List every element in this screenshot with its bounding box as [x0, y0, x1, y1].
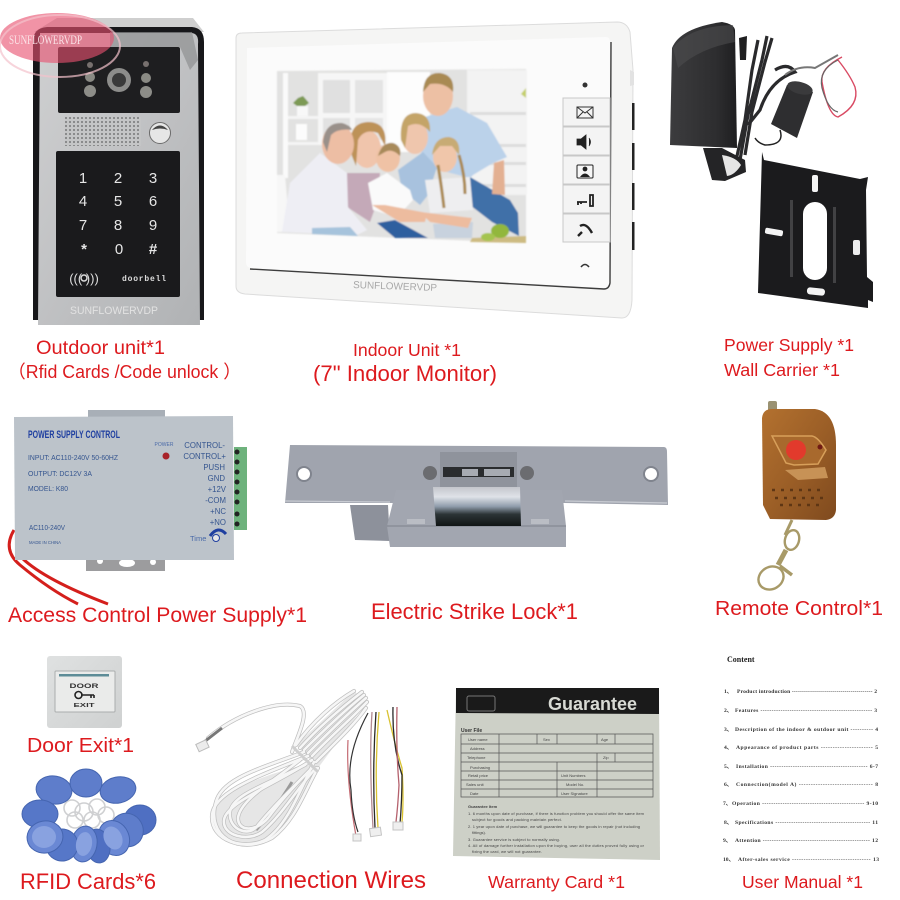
form table: Unit Numbers	[561, 773, 585, 778]
short lead: red	[348, 740, 356, 836]
icon: hang-up mark	[581, 264, 589, 267]
strike bolt	[433, 487, 521, 526]
form table: User Signature	[561, 791, 588, 796]
slot highlight	[785, 467, 828, 480]
terminal labels	[183, 441, 227, 527]
led	[818, 444, 822, 450]
icon: monitor person	[577, 165, 593, 178]
manual rows: Connection(model A) ------------------------------- 8	[736, 781, 878, 788]
keypad: 9	[149, 217, 157, 234]
monitor body	[236, 22, 634, 318]
label: wall carrier: Wall Carrier *1	[724, 360, 840, 380]
switch plate	[47, 656, 122, 728]
guarantee terms	[468, 804, 645, 854]
indicator dot	[582, 82, 588, 88]
guarantee terms: subject for goods and packing maintain perfect.	[472, 817, 562, 822]
guarantee title: Guarantee	[548, 694, 637, 714]
control box	[14, 416, 234, 560]
form table: Sex	[543, 737, 550, 742]
manual rows: 1、	[724, 689, 732, 695]
header logo	[467, 696, 495, 711]
keypad: 4	[79, 193, 87, 210]
time adjust: Time	[190, 534, 206, 543]
icon: phone handset	[578, 225, 592, 236]
form table: Sales unit	[466, 782, 484, 787]
brand text: SUNFLOWERVDP	[70, 305, 158, 317]
panel: power adapter and wall carrier	[670, 22, 873, 308]
box specifications	[28, 453, 118, 545]
manual rows: Description of the indoor & outdoor unit ---------- 4	[735, 727, 878, 733]
screen: family photo	[277, 69, 527, 243]
panel: electric strike lock	[285, 445, 668, 547]
form table: Age	[601, 737, 609, 742]
label: outdoor unit: Outdoor unit*1	[36, 337, 165, 359]
form table: Zip	[603, 755, 609, 760]
keypad	[56, 151, 180, 297]
exit text: EXIT	[74, 703, 96, 709]
cable end connector	[196, 728, 222, 752]
box specifications: OUTPUT: DC12V 3A	[28, 469, 93, 478]
wall carrier bracket	[758, 152, 873, 308]
short lead: black	[350, 713, 368, 832]
terminal labels: CONTROL-	[184, 441, 225, 450]
manual rows: 2、	[724, 708, 732, 714]
woman right	[398, 152, 437, 205]
terminal labels: GND	[208, 474, 225, 483]
manual rows: 4、	[724, 745, 732, 751]
brand text: SUNFLOWERVDP	[353, 280, 438, 294]
red button	[786, 440, 806, 460]
call button	[150, 122, 170, 144]
switch rocker	[55, 671, 115, 712]
woman left	[347, 173, 380, 222]
cable tie	[292, 746, 318, 772]
manual heading: Content	[727, 655, 755, 664]
form table: User name	[468, 737, 488, 742]
icon: speaker volume	[577, 135, 590, 149]
keypad: *	[81, 241, 87, 258]
guarantee terms: 1. 6 months upon date of purchase, if there is function problem you should offer the same item	[468, 811, 645, 816]
label: indoor unit: Indoor Unit *1	[353, 340, 461, 360]
form table: Purchasing	[470, 765, 490, 770]
boy	[368, 173, 413, 217]
manual rows: 5、	[724, 764, 732, 770]
label: rfid code unlock: （Rfid Cards /Code unlock ）	[8, 362, 241, 382]
box specifications: INPUT: AC110-240V 50-60HZ	[28, 453, 118, 462]
icon: message envelope	[577, 107, 593, 118]
red wires	[9, 530, 108, 604]
terminal labels: CONTROL+	[183, 452, 226, 461]
manual rows: 10、	[723, 857, 734, 863]
manual rows	[723, 689, 879, 863]
manual rows: Product introduction ---------------------------------------- 2	[737, 689, 877, 695]
power led: POWER	[155, 442, 174, 448]
guarantee terms: 3. Guarantee service is subject to normally using.	[468, 837, 560, 842]
guarantee terms: fittings).	[472, 830, 486, 835]
speaker grille	[65, 117, 141, 146]
form table: Retail price	[468, 773, 489, 778]
terminal labels: -COM	[205, 496, 226, 505]
panel: rfid key fobs	[22, 769, 156, 867]
terminal labels: +12V	[208, 485, 227, 494]
label: door exit: Door Exit*1	[27, 734, 134, 757]
manual rows: 8、	[724, 820, 732, 826]
short lead group 3	[387, 707, 403, 824]
keypad: 5	[114, 193, 122, 210]
dark gap in coil	[256, 782, 292, 830]
label: remote control: Remote Control*1	[715, 597, 883, 620]
apples and table	[470, 236, 526, 243]
indicator stripe	[59, 674, 109, 676]
guarantee terms: fixing the card, we will not guarantee.	[472, 849, 542, 854]
manual rows: 7、	[723, 801, 731, 807]
man standing	[470, 177, 519, 236]
old man	[282, 153, 367, 235]
manual rows: 3、	[724, 727, 732, 733]
manual rows: Features -------------------------------------------------- 3	[735, 708, 877, 714]
guarantee terms: 2. 1 year upon date of purchase, we will guarantee to keep the goods in repair (not including	[468, 824, 640, 829]
panel: user manual contents	[723, 655, 879, 863]
user file heading: User File	[461, 728, 482, 734]
remote body	[762, 409, 836, 520]
button plate	[772, 436, 826, 465]
icon: unlock key	[577, 195, 593, 206]
keypad: 8	[114, 217, 122, 234]
manual rows: Specifications ------------------------------------------ 11	[735, 820, 878, 826]
keychain	[754, 520, 801, 594]
label: connection wires: Connection Wires	[236, 867, 426, 894]
terminal block	[234, 447, 247, 530]
cable coil shadow layer	[208, 691, 367, 845]
label: electric strike lock: Electric Strike Lock*1	[371, 599, 578, 624]
panel: indoor monitor	[236, 22, 634, 318]
manual rows: Operation --------------------------------------------- 9-10	[732, 801, 878, 807]
terminal labels: +NO	[210, 518, 226, 527]
guarantee terms: 4. All of damage further installation upon the buying, user all the duties proved fully using or	[468, 843, 645, 848]
form table: Telephone	[467, 755, 486, 760]
keypad: 2	[114, 170, 122, 187]
watermark	[0, 13, 120, 77]
form table: Model No.	[566, 782, 584, 787]
key rings	[64, 799, 114, 828]
keypad: #	[149, 241, 158, 258]
watermark: SUNFLOWERVDP	[9, 32, 82, 47]
keypad: 0	[115, 241, 123, 258]
keypad: doorbell	[122, 275, 166, 284]
panel: warranty card	[453, 688, 660, 860]
strike plate	[285, 445, 668, 541]
keypad: ((( )))	[69, 271, 99, 286]
panel: remote control	[754, 401, 836, 594]
panel: connection wires	[196, 691, 403, 845]
keypad: 7	[79, 217, 87, 234]
panel: door exit button	[47, 656, 122, 728]
short lead group 2	[371, 712, 379, 828]
box specifications: MADE IN CHINA	[29, 540, 61, 545]
label: warranty card: Warranty Card *1	[488, 872, 625, 892]
mounting brackets	[86, 410, 165, 571]
terminal labels: +NC	[210, 507, 226, 516]
card header	[456, 688, 659, 714]
grille holes	[772, 490, 827, 505]
form table: Date	[470, 791, 479, 796]
label: rfid cards: RFID Cards*6	[20, 869, 156, 894]
box heading: POWER SUPPLY CONTROL	[28, 429, 120, 441]
box specifications: AC110-240V	[29, 523, 66, 532]
keypad: 1	[79, 170, 87, 187]
antenna tip	[768, 401, 777, 412]
manual rows: Attention ------------------------------------------------ 12	[735, 838, 878, 844]
cable coil base	[212, 691, 367, 844]
doorbell housing	[33, 18, 204, 325]
cable coil	[208, 691, 367, 845]
girl	[425, 177, 473, 213]
card body	[453, 688, 660, 860]
time adjust	[190, 530, 226, 543]
label: indoor monitor size: (7" Indoor Monitor)	[313, 361, 497, 386]
form table: Address	[470, 746, 485, 751]
keypad: 3	[149, 170, 157, 187]
keypad: 6	[149, 193, 157, 210]
power adapter	[670, 22, 795, 181]
panel: access control power supply	[9, 410, 247, 604]
cable filter and leads	[755, 55, 856, 145]
manual rows: Installation ------------------------------------------- 6-7	[736, 764, 878, 770]
power led	[155, 442, 174, 460]
terminal labels: PUSH	[203, 463, 225, 472]
latch housing	[387, 452, 566, 547]
label: user manual: User Manual *1	[742, 872, 863, 892]
label: access control power supply: Access Control Power Supply*1	[8, 604, 307, 627]
manual rows: Appearance of product parts ---------------------- 5	[736, 745, 878, 751]
box specifications: MODEL: K80	[28, 484, 68, 493]
function buttons	[563, 98, 610, 242]
lead connectors	[353, 822, 403, 841]
fob cluster	[22, 769, 156, 867]
guarantee terms: Guarantee Item	[468, 804, 498, 809]
manual rows: 6、	[724, 782, 732, 788]
manual rows: 9、	[723, 838, 731, 844]
form table	[461, 734, 653, 797]
camera window	[58, 47, 180, 113]
label: power supply: Power Supply *1	[724, 335, 854, 355]
icon: key	[75, 692, 94, 699]
panel: outdoor unit	[0, 13, 204, 325]
door text: DOOR	[70, 684, 100, 690]
manual rows: After-sales service ---------------------------------- 13	[738, 857, 879, 863]
